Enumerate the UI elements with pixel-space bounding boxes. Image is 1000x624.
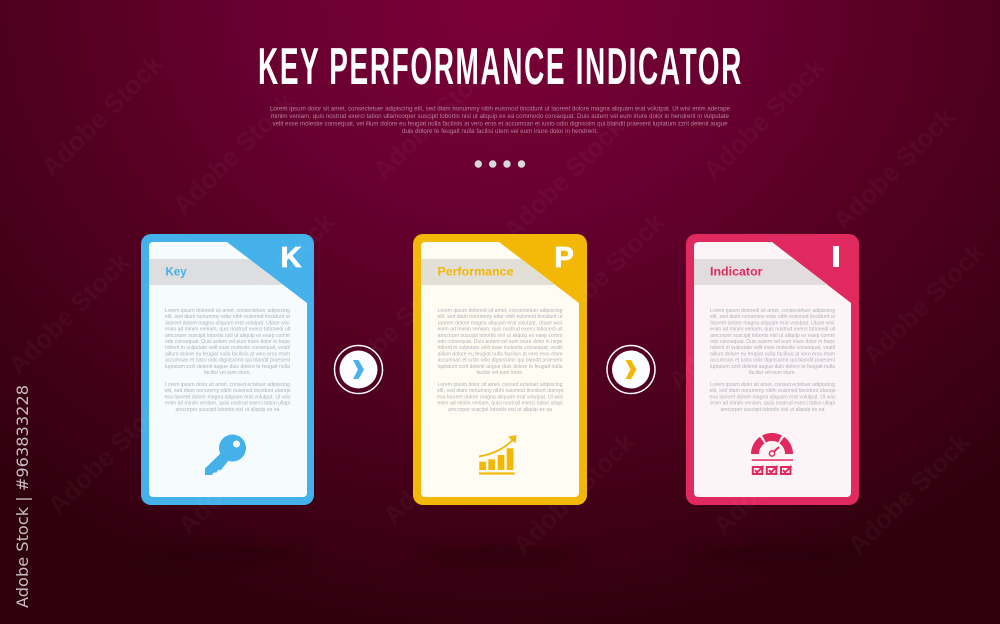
stock watermarks: Adobe Stock bbox=[377, 396, 511, 530]
body text: odo consequat. Duis autem vel eum iriure dolor in hepe bbox=[710, 339, 835, 345]
body text: elit, sed diam nonummy nibhi euismod tincidunt utarepi bbox=[164, 388, 290, 394]
panel: Indicator bbox=[686, 234, 859, 505]
body text: eoa laoreet dolore magna aliquam erat volutpat. Ut wisi bbox=[437, 394, 563, 400]
stock watermarks: Adobe Stock bbox=[327, 261, 461, 395]
body text: enim ad minim veniam, quis nostrud exerci tationedi ull bbox=[710, 327, 835, 333]
body text: enim ad minim veniam, quisi nostrud exerci tation ullapi bbox=[710, 401, 835, 407]
body text: luptatum zzril delenit augue duis dolore te feugait nulla bbox=[438, 364, 563, 370]
stock watermarks: Adobe Stock bbox=[35, 48, 169, 182]
heading: Indicator bbox=[710, 266, 763, 278]
body text: ndrerit in vulputate velit esse molestie consequat, veatil bbox=[438, 345, 562, 351]
body text: aillum dolore eu feugiat nulla facilisis at vero eros etam bbox=[438, 351, 562, 357]
body text: enim ad minim veniam, quisi nostrud exerci tation ullapi bbox=[438, 401, 562, 407]
body text: enim ad minim veniam, quisi nostrud exerci tation ullapi bbox=[165, 401, 290, 407]
body text: elit, sed diam nonummy edar nibh euismod tincidunt ut bbox=[165, 314, 291, 320]
body text bbox=[164, 308, 291, 413]
card sheet bbox=[694, 242, 851, 497]
stock watermarks: Adobe Stock bbox=[537, 206, 671, 340]
body text: elit, sed diam nonummy edar nibh euismod tincidunt ut bbox=[438, 314, 563, 320]
body text: laoreet dolore magna aliquam erat volutpat. Utase wisi bbox=[438, 320, 562, 326]
card sheet bbox=[421, 242, 579, 497]
stock watermarks: Adobe Stock bbox=[507, 426, 641, 560]
body text: odo consequat. Duis autem vel eum iriure dolor in hepe bbox=[165, 339, 290, 345]
letter I bbox=[833, 246, 839, 267]
stock watermarks: Adobe Stock bbox=[172, 406, 306, 540]
body text: amcorper suscipit lobortis nisl ut aliquip ex ea bbox=[720, 407, 825, 413]
body text: laoreet dolore magna aliquam erat volutpat. Utase wisi bbox=[710, 320, 834, 326]
body text: aillum dolore eu feugiat nulla facilisis at vero eros etam bbox=[710, 351, 835, 357]
heading: Key bbox=[166, 266, 187, 278]
pagination dots bbox=[475, 160, 525, 168]
body text: facilisi vel eum iriure. bbox=[476, 370, 524, 376]
body text: ndrerit in vulputate velit esse molestie consequat, veatil bbox=[165, 345, 290, 351]
card shadows bbox=[143, 549, 857, 561]
heading band bbox=[149, 259, 283, 285]
body text: aillum dolore eu feugiat nulla facilisis at vero eros etam bbox=[165, 351, 290, 357]
body text: facilisi vel eum iriure. bbox=[204, 370, 251, 376]
body text: facilisi vel eum iriure. bbox=[749, 370, 796, 376]
arrow 2 bbox=[607, 346, 655, 394]
body text bbox=[437, 308, 563, 413]
body text: amcorper suscipit lobortis nisl ut aliquip ex ea bbox=[448, 407, 552, 413]
body text: laoreet dolore magna aliquam erat volutpat. Utase wisi bbox=[166, 320, 290, 326]
icon: key bbox=[205, 434, 246, 475]
stock watermarks: Adobe Stock bbox=[167, 86, 301, 220]
body text: amcorper suscipit lobortis nisl ut aliquip ex eaep comm bbox=[438, 333, 562, 339]
heading band bbox=[421, 259, 555, 285]
body text: accumsan et iusto odio dignissimir qui blandit praesent bbox=[165, 358, 291, 364]
body text: elit, sed diam nonummy edar nibh euismod tincidunt ut bbox=[710, 314, 836, 320]
stock watermarks: Adobe Stock bbox=[2, 246, 136, 380]
body text: luptatum zzril delenit augue duis dolore te feugait nulla bbox=[710, 364, 835, 370]
stock id label: Adobe Stock | #963833228 bbox=[13, 385, 32, 608]
intro paragraph: duis dolore te feugait nulla facilisi utem vel eum iriure dolor in hendrerit. bbox=[402, 128, 598, 135]
body text: eoa laoreet dolore magna aliquam erat volutpat. Ut wisi bbox=[164, 394, 290, 400]
body text: odo consequat. Duis autem vel eum iriure dolor in hepe bbox=[438, 339, 563, 345]
stock watermarks: Adobe Stock bbox=[367, 51, 501, 185]
body text: Lorem ipsum dolor sit amet, consed ectetuer adipiscing bbox=[165, 382, 290, 388]
heading band bbox=[694, 259, 828, 285]
icon: growth chart bbox=[479, 435, 516, 475]
body text: amcorper suscipit lobortis nisl ut aliquip ex ea bbox=[176, 407, 280, 413]
body text: elit, sed diam nonummy nibhi euismod tincidunt utarepi bbox=[710, 388, 836, 394]
icon: gauge with checkboxes bbox=[752, 437, 793, 474]
body text: Lorem ipsum doloredi sit amet, consectetuer adipiscing bbox=[438, 308, 563, 314]
body text: eoa laoreet dolore magna aliquam erat volutpat. Ut wisi bbox=[710, 394, 836, 400]
intro paragraph bbox=[270, 106, 731, 135]
card frame bbox=[413, 234, 587, 505]
stock watermarks: Adobe Stock bbox=[827, 101, 961, 235]
panel: Key bbox=[141, 234, 314, 505]
body text: ndrerit in vulputate velit esse molestie consequat, veatil bbox=[710, 345, 835, 351]
card sheet bbox=[149, 242, 307, 497]
body text: luptatum zzril delenit augue duis dolore te feugait nulla bbox=[165, 364, 290, 370]
body text: accumsan et iusto odio dignissimir qui blandit praesent bbox=[710, 358, 836, 364]
body text: enim ad minim veniam, quis nostrud exerci tationedi ull bbox=[165, 327, 290, 333]
intro paragraph: Lorem ipsum dolor sit amet, consectetuer adipiscing elit, sed diam nonummy nibh euismod tincidunt ut laoreet dolore magna aliquam erat volutpat. Ut wisi enim aderape bbox=[270, 106, 731, 112]
stock watermarks: Adobe Stock bbox=[857, 236, 991, 370]
stock watermarks: Adobe Stock bbox=[42, 386, 176, 520]
stock watermarks: Adobe Stock bbox=[842, 426, 976, 560]
body text: Lorem ipsum doloredi sit amet, consectetuer adipiscing bbox=[710, 308, 835, 314]
heading: Performance bbox=[438, 266, 514, 278]
body text: elit, sed diam nonummy nibhi euismod tincidunt utarepi bbox=[437, 388, 563, 394]
body text bbox=[710, 308, 836, 413]
body text: amcorper suscipit lobortis nisl ut aliquip ex eaep comm bbox=[165, 333, 290, 339]
card frame bbox=[686, 234, 859, 505]
body text: amcorper suscipit lobortis nisl ut aliquip ex eaep comm bbox=[710, 333, 835, 339]
body text: Lorem ipsum dolor sit amet, consed ectetuer adipiscing bbox=[438, 382, 563, 388]
stock watermarks: Adobe Stock bbox=[207, 206, 341, 340]
letter K: K bbox=[281, 242, 302, 274]
stock watermarks: Adobe Stock bbox=[662, 261, 796, 395]
card frame bbox=[141, 234, 314, 505]
intro paragraph: minim veniam, quis nostrud exerci tation ullamcorper suscipit lobortis nisl ut aliquip ex ea commodo consequat. Duis autem vel eum iriure dolor in hendrerit in vulputate bbox=[271, 113, 730, 120]
stock watermarks: Adobe Stock bbox=[697, 51, 831, 185]
intro paragraph: velit esse molestie consequat, vel illum dolore eu feugiat nulla facilisis at vero eros et accumsan et iusto odio dignissim qui blandit praesent luptatum zzril delenit augue bbox=[272, 120, 728, 128]
panel: Performance bbox=[413, 234, 587, 505]
stock watermarks: Adobe Stock bbox=[707, 406, 841, 540]
body text: Lorem ipsum dolor sit amet, consed ectetuer adipiscing bbox=[710, 382, 835, 388]
arrow 1 bbox=[334, 346, 382, 394]
stock watermarks: Adobe Stock bbox=[497, 111, 631, 245]
letter P: P bbox=[554, 242, 574, 274]
body text: accumsan et iusto odio dignissimir qui blandit praesent bbox=[438, 358, 563, 364]
body text: enim ad minim veniam, quis nostrud exerci tationedi ull bbox=[438, 327, 562, 333]
body text: Lorem ipsum doloredi sit amet, consectetuer adipiscing bbox=[165, 308, 290, 314]
